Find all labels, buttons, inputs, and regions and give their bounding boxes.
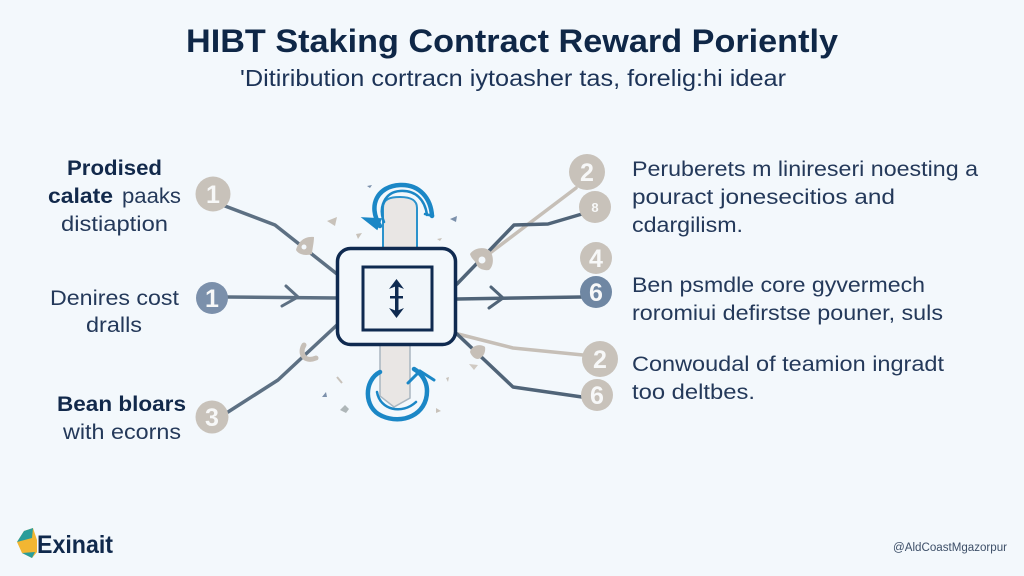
central contract icon [338,185,456,419]
top bar [383,197,417,250]
badge 6 lower: 6 [590,382,604,410]
label: top left: Prodised [67,157,162,180]
label: bottom left: Bean bloars [57,393,186,416]
badge 1: 1 [206,181,220,209]
label: top right: pouract jonesecitios and [632,186,895,209]
logo [17,528,114,559]
top blue arrow [363,185,433,229]
title: HIBT Staking Contract Reward Poriently [186,23,838,59]
label: bottom right: Conwoudal of teamion ingradt [632,353,944,376]
scattered confetti [322,185,457,413]
badge blurred: 8 [591,200,599,215]
badge 4: 4 [589,245,603,273]
left labels [48,157,186,444]
label: middle left: dralls [86,314,142,337]
badge 4 [580,242,612,274]
badge 2 [569,154,605,190]
badge 6 blue: 6 [589,279,603,307]
badge 2 lower: 2 [593,346,607,374]
label: middle left: Denires cost [50,287,179,310]
label: bottom left [57,393,186,444]
right labels [632,158,978,404]
label: top right: cdargilism. [632,214,743,237]
badge 2 lower [582,341,618,377]
label: top left: calate [48,185,113,208]
footer credit: @AldCoastMgazorpur [893,542,1007,554]
badge 1 [196,176,230,212]
label: bottom right [632,353,944,404]
badge 3 [196,400,228,434]
badge 6 blue [580,276,612,308]
label: middle left [50,287,179,337]
label: bottom right: too deltbes. [632,381,755,404]
badge blurred [579,191,611,223]
connectors: right [457,188,583,397]
left numbered circles [196,176,230,434]
logo mark [17,528,37,558]
badge 6 lower [581,379,613,411]
label: top right [632,158,978,237]
label: top left [48,157,181,236]
badge 1 blue [196,282,228,314]
outer box [338,248,456,344]
label: bottom left: with ecorns [62,421,181,444]
badge 3: 3 [205,404,219,432]
connectors: left [225,206,337,412]
knots on connectors [296,237,493,370]
label: middle right: Ben psmdle core gyvermech [632,274,925,297]
label: top left: paaks [122,185,181,208]
inner box [363,267,432,330]
label: top right: Peruberets m linireseri noesting a [632,158,978,181]
logo wordmark: Exinait [37,531,114,559]
badge 1 blue: 1 [205,285,219,313]
label: top left: distiaption [61,213,168,236]
label: middle right [632,274,943,325]
badge 2: 2 [580,159,594,187]
bottom blue arrow [368,369,434,419]
subtitle: 'Ditiribution cortracn iytoasher tas, forelig:hi idear [240,65,786,91]
bottom bar [380,345,410,407]
double arrow icon [389,279,404,318]
label: middle right: roromiui defirstse pouner, suls [632,302,943,325]
right numbered circles [569,154,618,411]
